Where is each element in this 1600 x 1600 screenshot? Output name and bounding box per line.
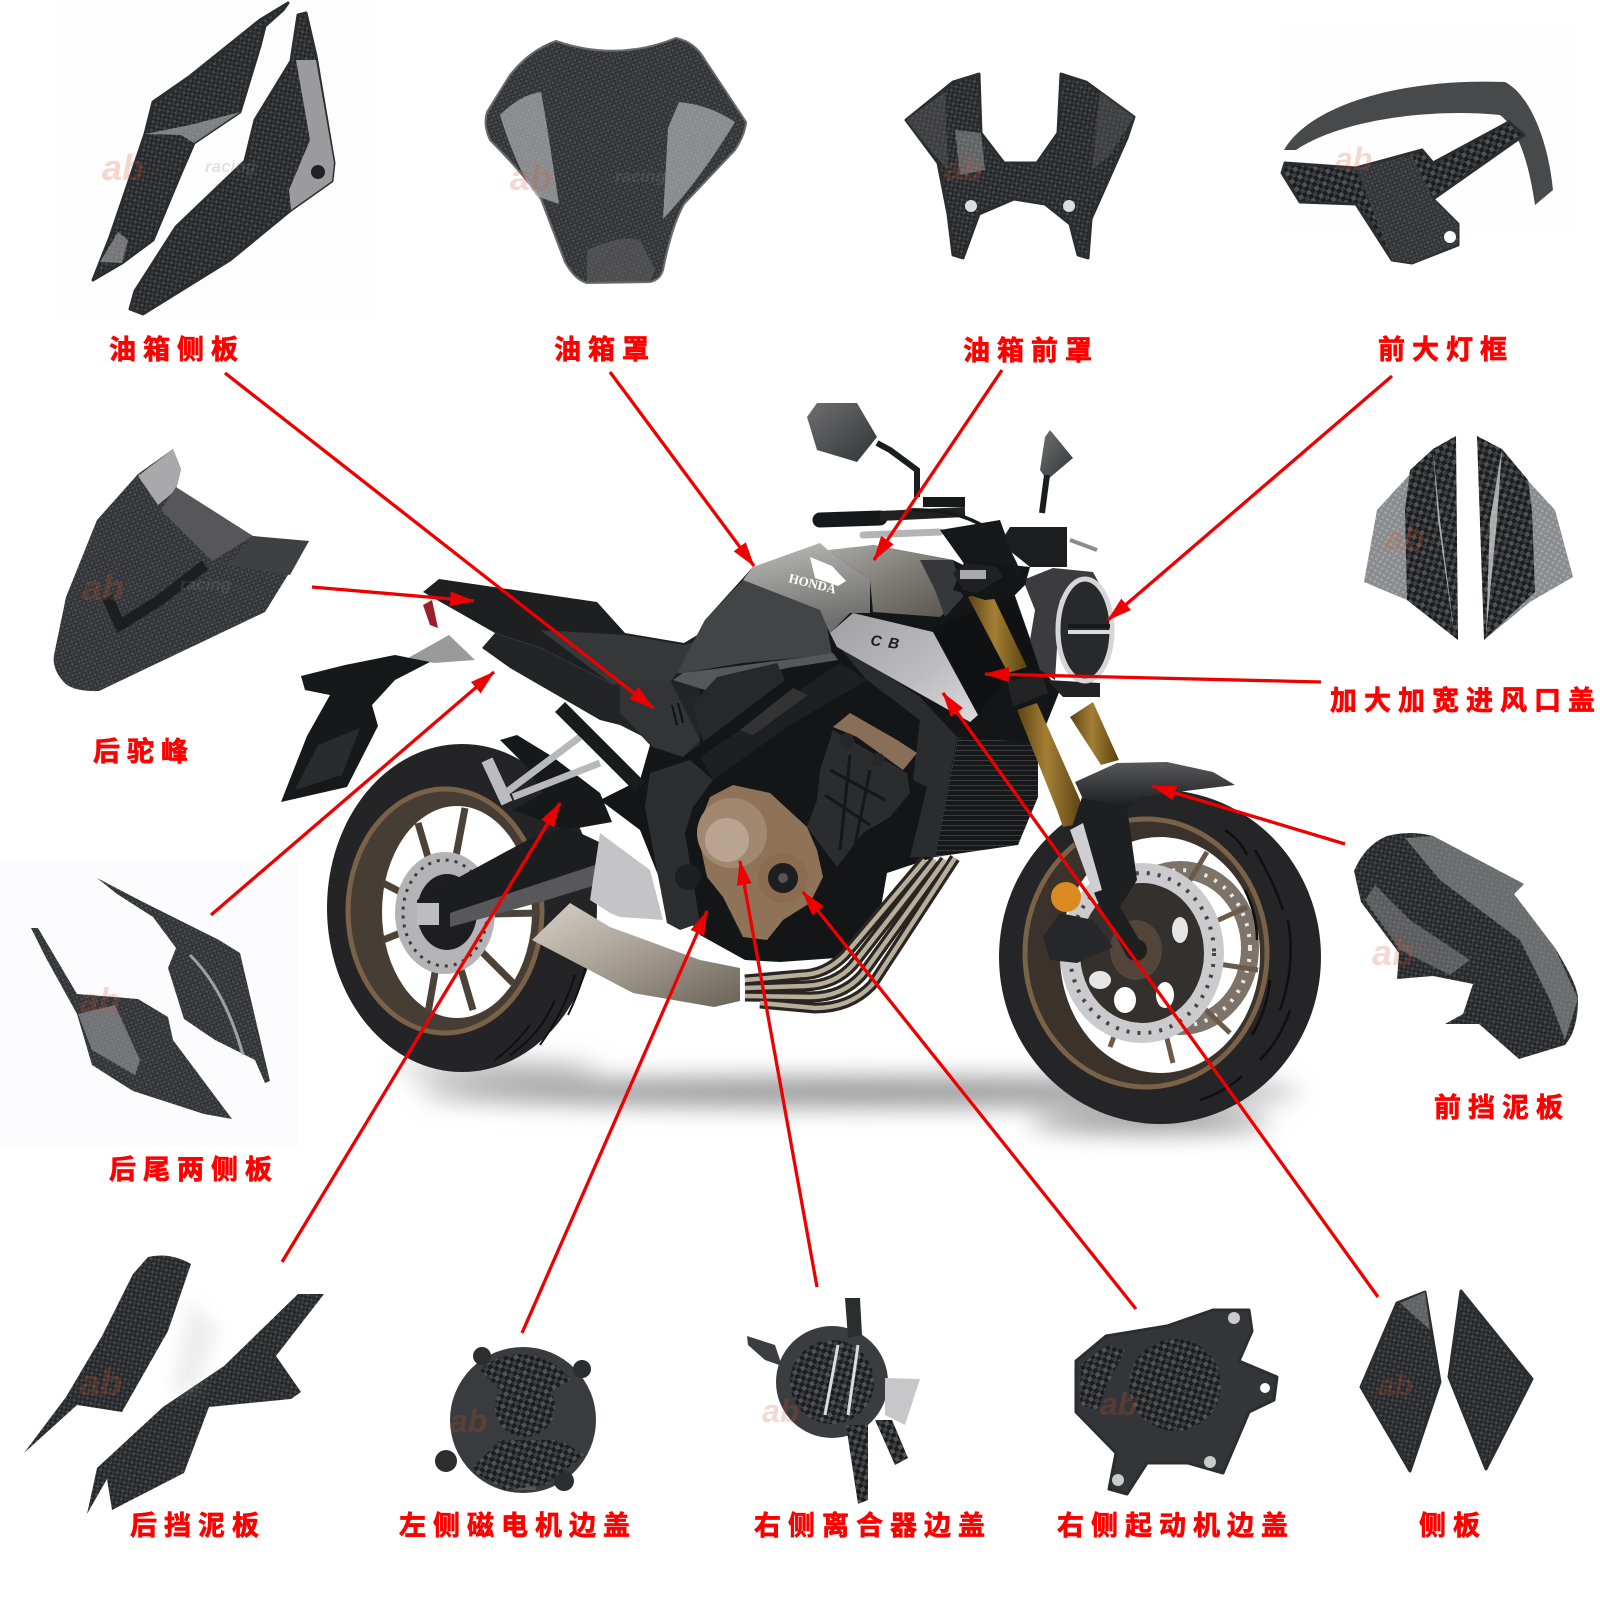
silver shroud xyxy=(830,613,978,722)
part photo: side panels xyxy=(1361,1291,1532,1471)
fuel tank xyxy=(673,543,963,742)
Honda tank badge xyxy=(787,557,846,597)
part photo: front fender xyxy=(1354,833,1578,1059)
headlight xyxy=(933,568,1112,715)
arrow: intake cover xyxy=(985,674,1321,682)
part photo: rear hugger xyxy=(24,1256,324,1514)
part photo: rear seat cowl xyxy=(54,449,309,691)
motorcycle photo xyxy=(281,403,1321,1124)
rear footpeg bracket xyxy=(590,833,663,920)
front fork xyxy=(968,590,1147,963)
watermarks: ab xyxy=(1372,932,1414,973)
label: 前大灯框: 前大灯框 xyxy=(1378,335,1514,365)
engine cylinder and covers xyxy=(697,713,917,940)
ground shadow xyxy=(400,1062,1300,1132)
label: 前挡泥板: 前挡泥板 xyxy=(1434,1093,1570,1123)
arrow: tank front cover xyxy=(874,370,1002,560)
muffler xyxy=(532,903,740,1007)
label: 右侧离合器边盖: 右侧离合器边盖 xyxy=(754,1511,992,1541)
label: 油箱前罩: 油箱前罩 xyxy=(963,336,1099,366)
arrow: tail side panels xyxy=(211,672,494,915)
watermarks: ab xyxy=(80,1362,122,1403)
front fender on bike xyxy=(1075,762,1235,808)
amber reflector xyxy=(1051,882,1081,912)
label: 后驼峰: 后驼峰 xyxy=(93,736,195,767)
arrow: seat cowl xyxy=(312,587,474,601)
watermarks: ab xyxy=(1385,520,1425,558)
watermarks: ab xyxy=(510,157,552,198)
arrow: right starter cover xyxy=(803,892,1136,1309)
label: 右侧起动机边盖: 右侧起动机边盖 xyxy=(1057,1511,1295,1541)
label: 左侧磁电机边盖: 左侧磁电机边盖 xyxy=(399,1511,637,1541)
part photo: tank front cover xyxy=(906,74,1134,258)
exhaust headers xyxy=(745,858,955,1008)
part photo: tank cover xyxy=(486,38,746,283)
front wheel xyxy=(999,790,1321,1124)
watermarks: ab xyxy=(82,567,124,608)
part photo: tail side panels xyxy=(31,878,270,1119)
Honda tank badge: HONDA xyxy=(787,570,838,597)
watermarks xyxy=(80,141,1425,1439)
engine and body backing xyxy=(600,545,1060,962)
watermarks: ab xyxy=(80,982,120,1020)
watermarks: ab xyxy=(450,1403,487,1439)
watermarks: racing xyxy=(615,167,667,186)
frame xyxy=(645,640,957,930)
arrow: right clutch cover xyxy=(740,861,817,1287)
arrow: front fender xyxy=(1152,786,1345,844)
arrow: tank side panels xyxy=(225,373,653,708)
rear hugger and swingarm xyxy=(417,735,612,927)
part photo: tank side panels xyxy=(93,3,334,314)
arrow: side panels xyxy=(943,693,1378,1297)
part photo: headlight frame xyxy=(1282,82,1553,263)
watermarks: ab xyxy=(945,151,982,187)
label: 油箱侧板: 油箱侧板 xyxy=(109,335,245,365)
silver shroud: CB xyxy=(869,632,907,654)
label: 加大加宽进风口盖: 加大加宽进风口盖 xyxy=(1330,686,1600,716)
watermarks: ab xyxy=(1378,1369,1413,1402)
part photo: left magneto cover xyxy=(435,1347,596,1493)
radiator xyxy=(935,737,1038,857)
mirrors and handlebar xyxy=(807,403,1097,600)
arrow: tank cover xyxy=(610,372,754,566)
watermarks: racing xyxy=(205,157,257,176)
arrow: left magneto cover xyxy=(522,911,707,1333)
watermarks: ab xyxy=(1100,1386,1137,1422)
watermarks: ab xyxy=(1335,141,1372,177)
watermarks: ab xyxy=(762,1393,799,1429)
license plate bracket xyxy=(281,635,475,802)
rear wheel xyxy=(327,744,597,1072)
label: 后挡泥板: 后挡泥板 xyxy=(130,1511,266,1541)
arrow: rear hugger xyxy=(282,803,560,1262)
label: 侧板: 侧板 xyxy=(1419,1511,1487,1541)
watermarks: racing xyxy=(180,575,232,594)
part photo: right starter cover xyxy=(1076,1310,1277,1494)
watermarks: ab xyxy=(102,147,144,188)
label: 油箱罩: 油箱罩 xyxy=(554,335,656,365)
part photo: intake covers xyxy=(1364,436,1573,640)
part photo: right clutch cover xyxy=(747,1298,920,1504)
label: 后尾两侧板: 后尾两侧板 xyxy=(109,1155,279,1185)
arrow: headlight frame xyxy=(1108,376,1392,620)
seat, tail and side cover xyxy=(423,579,718,787)
